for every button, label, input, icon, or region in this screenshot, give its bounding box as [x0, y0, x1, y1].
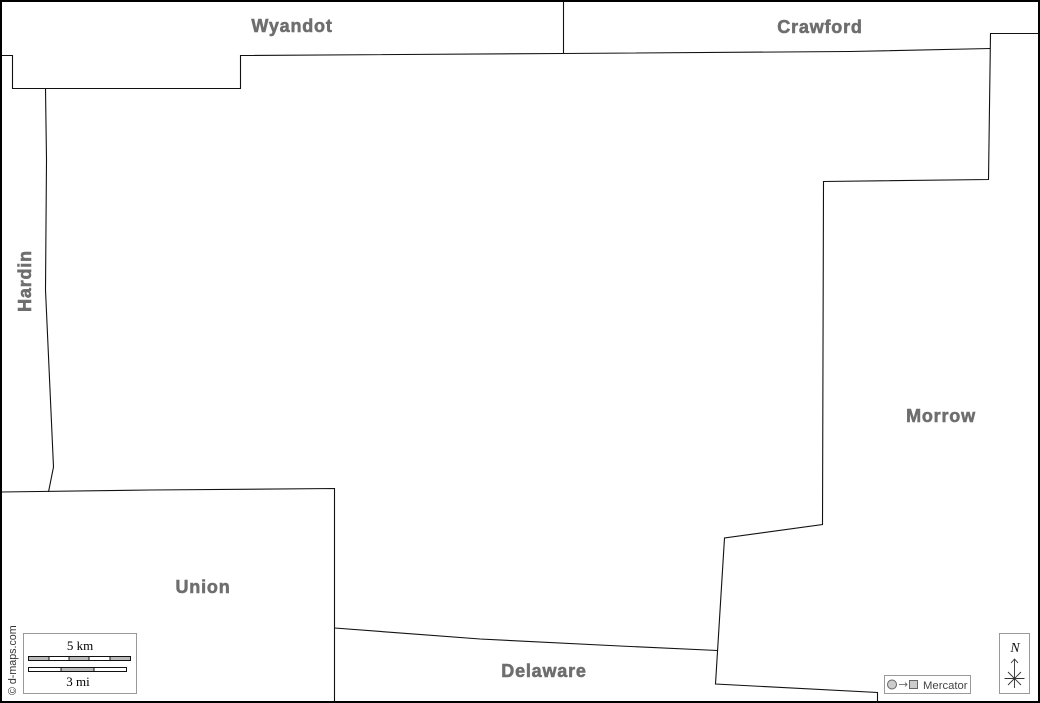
county label: Hardin: Hardin: [15, 250, 35, 312]
copyright credit: © d-maps.com: [7, 625, 19, 695]
scale bar: 5 km: [67, 638, 93, 653]
north arrow: [1000, 634, 1030, 694]
projection legend: Mercator: [884, 676, 970, 694]
scale bar: [24, 634, 136, 694]
county label: Union: Union: [176, 577, 230, 597]
county label: Crawford: Crawford: [777, 17, 863, 37]
scale bar: 3 mi: [66, 674, 90, 689]
north arrow: N: [1009, 641, 1020, 656]
county label: Delaware: Delaware: [501, 661, 587, 681]
projection legend: Mercator: Mercator: [923, 680, 968, 692]
county label: Wyandot: Wyandot: [251, 16, 333, 36]
county label: Morrow: Morrow: [906, 406, 976, 426]
